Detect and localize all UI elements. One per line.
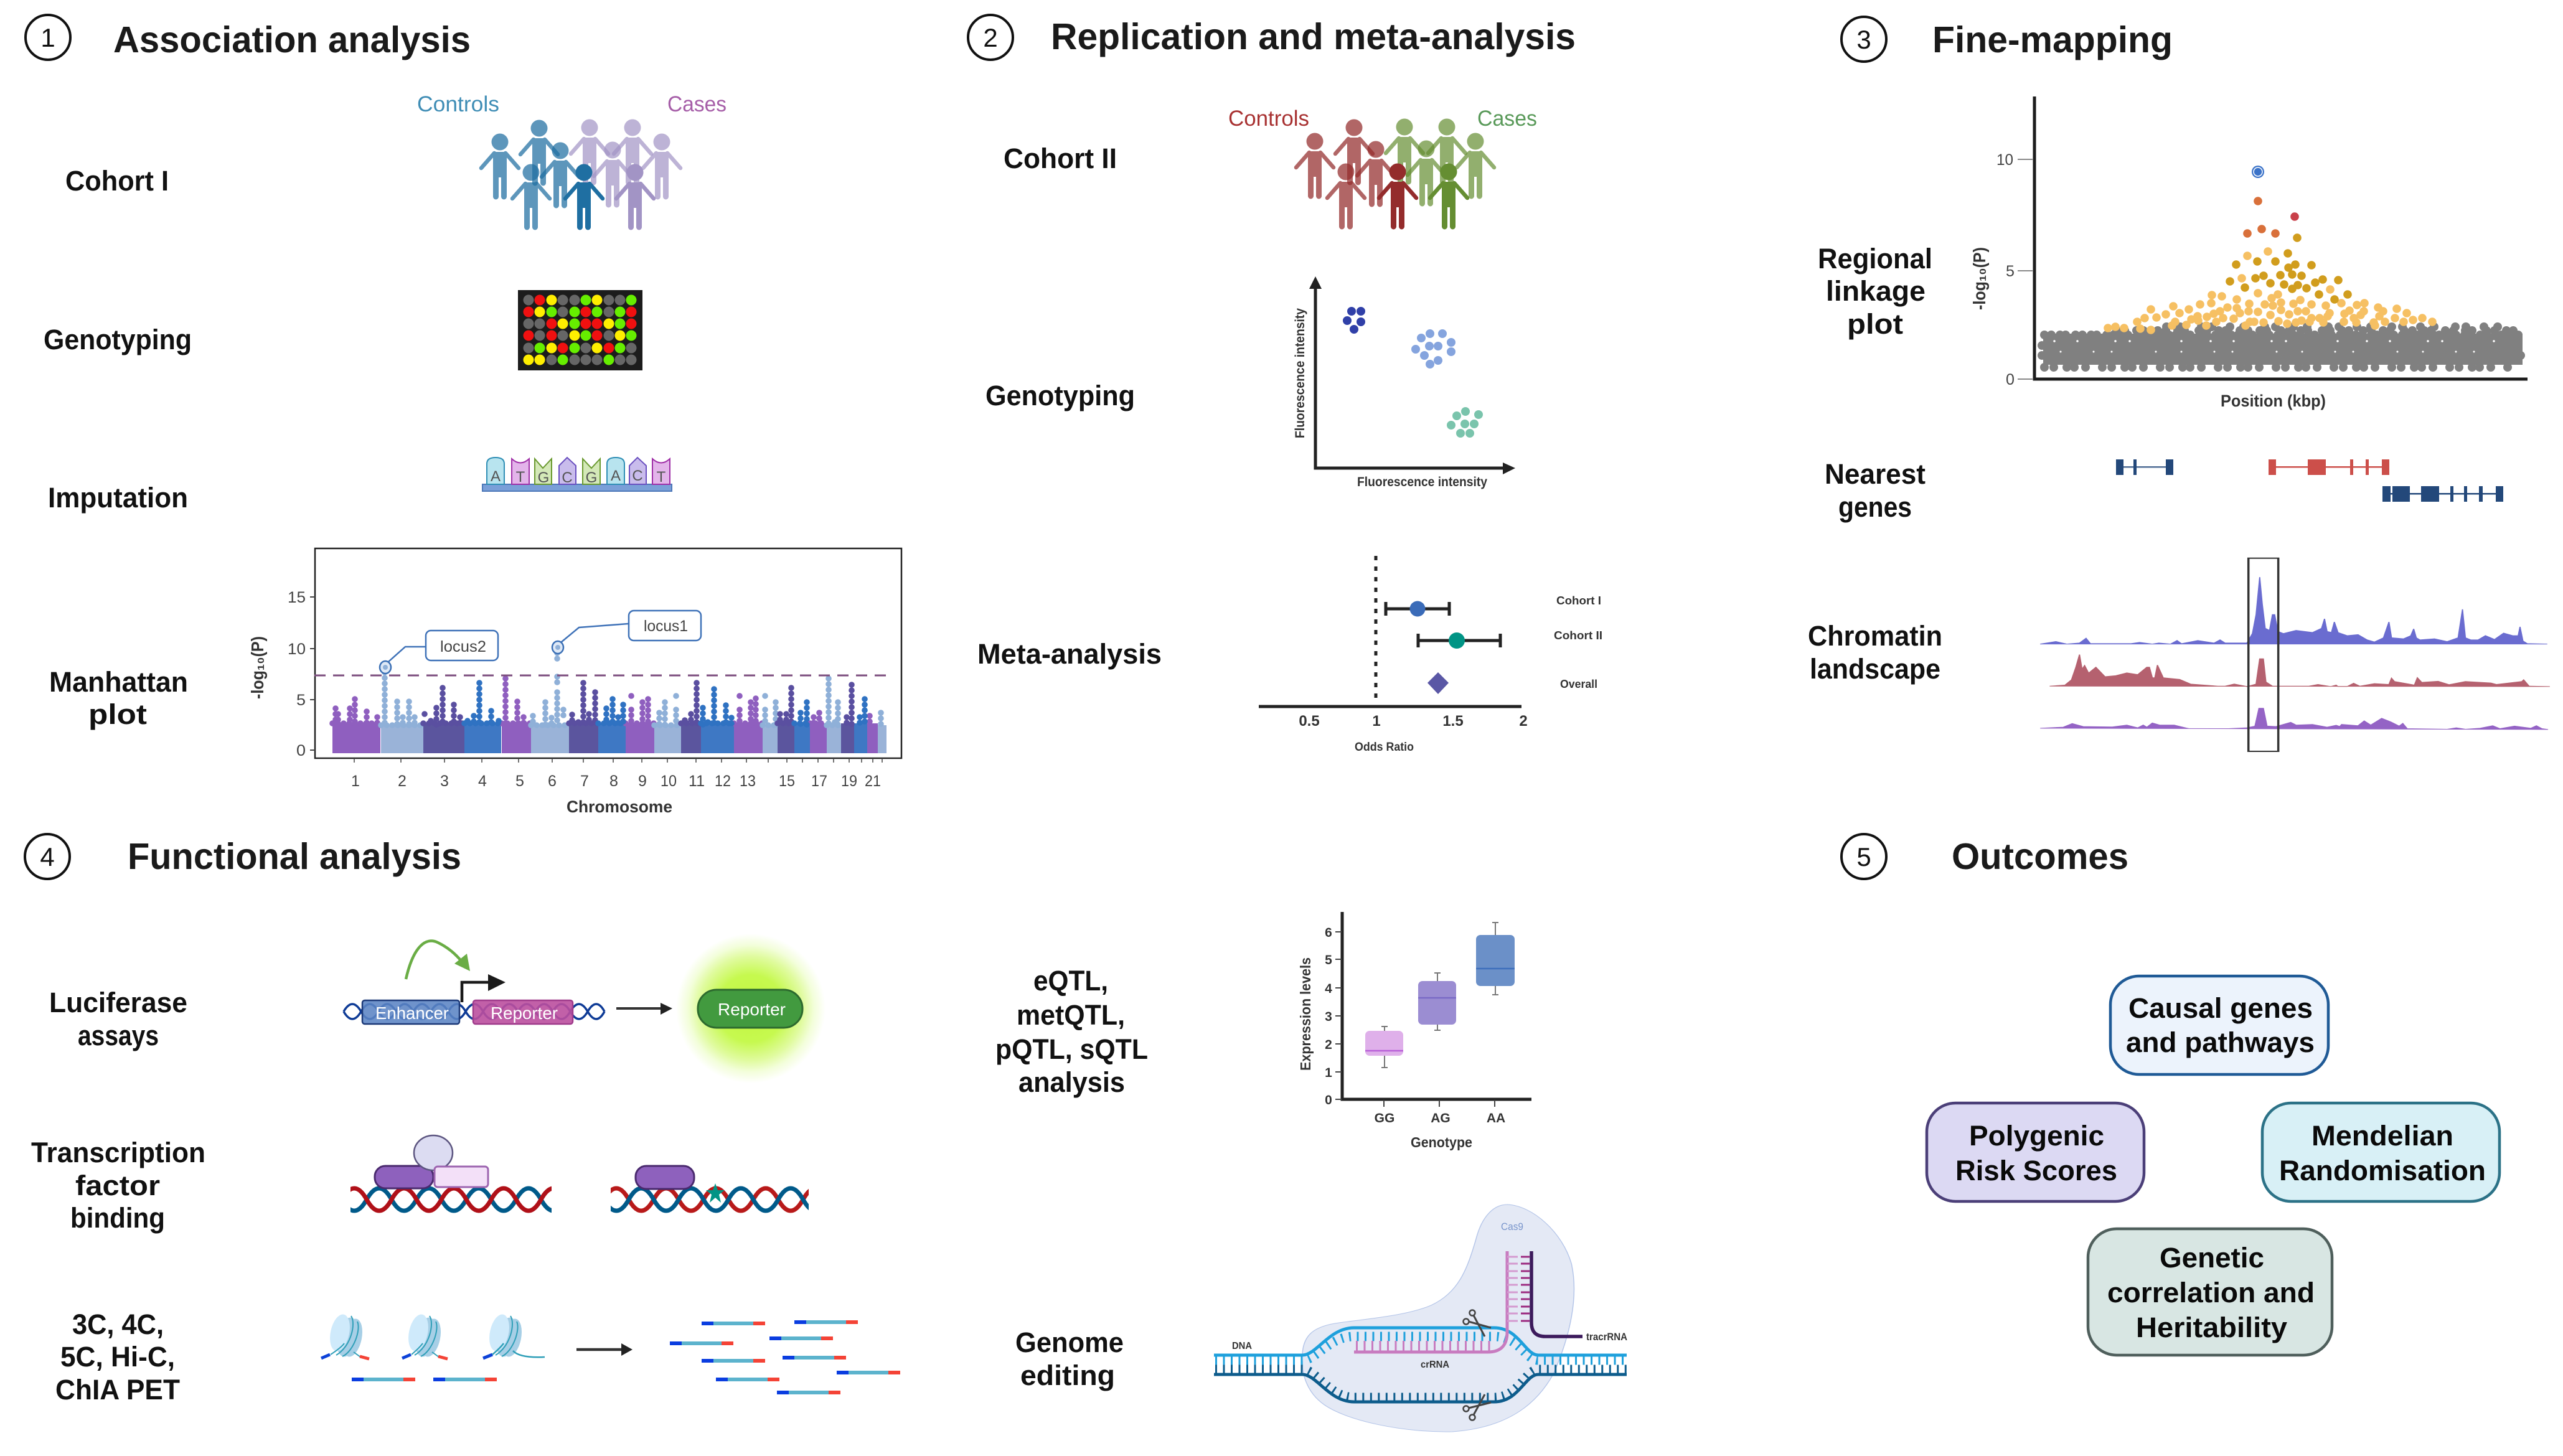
arrow: promoter (462, 974, 506, 1002)
label: 3C 4C 5C Hi-C ChIA PET (55, 1308, 180, 1406)
chart: forest plot: 2 (1519, 713, 1528, 730)
box: genetic correlation and heritability: correlation and (2107, 1277, 2315, 1308)
cases label: Cases (667, 92, 727, 116)
label: 3C 4C 5C Hi-C ChIA PET: 3C, 4C, (72, 1308, 164, 1340)
chart: expression box plot: AG (1431, 1111, 1451, 1125)
chart: expression box plot: 1 (1325, 1066, 1332, 1080)
x axis ticks and labels (351, 758, 882, 790)
LD SNPs (2108, 201, 2432, 330)
label: chromatin landscape: landscape (1810, 653, 1940, 685)
chart: chromatin tracks (2040, 558, 2550, 751)
x axis ticks and labels: 13 (740, 773, 756, 790)
chart: regional linkage plot: 5 (2006, 263, 2015, 280)
locus 1 callout: locus1 (644, 618, 688, 635)
label: cohort II: Cohort II (1004, 143, 1117, 174)
label: meta-analysis: Meta-analysis (977, 638, 1162, 670)
box: causal genes and pathways: and pathways (2126, 1026, 2315, 1058)
label: nearest genes (1825, 458, 1926, 523)
panel: replication and meta-analysis (968, 15, 1602, 754)
icon: imputation nucleotides: T (657, 469, 666, 486)
x axis ticks and labels: 12 (715, 773, 731, 790)
locus 2 callout: locus2 (440, 638, 486, 655)
association dots (332, 647, 881, 725)
gene: navy 2 (2382, 486, 2503, 502)
x axis ticks and labels: 1 (351, 773, 360, 790)
label: luciferase assays (49, 987, 187, 1051)
x axis ticks and labels: 3 (440, 773, 449, 790)
box: polygenic risk scores: Polygenic (1969, 1120, 2104, 1152)
background SNPs (2042, 327, 2525, 367)
chart: expression box plot: 2 (1325, 1038, 1332, 1052)
step number 1 (26, 15, 70, 60)
gene models (2116, 459, 2503, 502)
chart: genotype clusters: Fluorescence intensity (1293, 308, 1307, 438)
track: purple (2040, 708, 2548, 730)
heading: outcomes: Outcomes (1952, 836, 2128, 877)
diagram: CRISPR Cas9: tracrRNA (1586, 1331, 1627, 1343)
label: 3C 4C 5C Hi-C ChIA PET: 5C, Hi-C, (60, 1341, 175, 1373)
step number 5 (1841, 834, 1886, 879)
label: genome editing: editing (1020, 1360, 1115, 1391)
chart: expression box plot: Genotype (1411, 1134, 1472, 1150)
scissors (1463, 1310, 1491, 1421)
chart: expression box plot: 6 (1325, 926, 1332, 940)
chart: forest plot: 0.5 (1299, 713, 1320, 730)
icon: imputation nucleotides: G (586, 469, 597, 486)
box: GG (1365, 1026, 1403, 1068)
diagram: CRISPR Cas9: Cas9 (1501, 1221, 1523, 1233)
box: polygenic risk scores (1927, 1103, 2144, 1201)
cohort II estimate (1418, 632, 1500, 649)
icon: imputation nucleotides: T (516, 469, 525, 486)
heading: fine-mapping: Fine-mapping (1932, 19, 2173, 60)
chart: forest plot: Cohort II (1554, 629, 1602, 642)
chart: genotype clusters (1293, 276, 1515, 489)
Cas9 protein (1302, 1205, 1574, 1432)
chart: forest plot (1259, 556, 1602, 754)
diagram: CRISPR Cas9 (1214, 1205, 1627, 1432)
tracrRNA (1521, 1251, 1582, 1336)
box: causal genes and pathways: Causal genes (2128, 992, 2313, 1024)
diagram: luciferase reporter construct (344, 941, 604, 1024)
x axis ticks and labels: 17 (811, 773, 827, 790)
heading: replication and meta-analysis: Replication and meta-analysis (1051, 16, 1576, 57)
chart: expression box plot: 0 (1325, 1093, 1332, 1107)
arrow: chromatin capture (576, 1343, 633, 1356)
label: QTL analysis: pQTL, sQTL (995, 1033, 1148, 1065)
panel: fine-mapping (1808, 17, 2550, 751)
x axis ticks and labels: 2 (398, 773, 407, 790)
chart: regional linkage plot: -log₁₀(P) (1970, 247, 1989, 310)
x axis ticks and labels: 21 (865, 773, 881, 790)
chart: expression box plot: AA (1487, 1111, 1505, 1125)
locus 2 callout (380, 631, 498, 674)
x axis ticks and labels: 15 (779, 773, 795, 790)
diagram: nucleosomes (321, 1313, 545, 1359)
step number 4 (25, 834, 70, 879)
label: genotyping: Genotyping (44, 324, 192, 355)
highlight box (2249, 558, 2278, 751)
box: AA (1476, 923, 1515, 995)
diagram: CRISPR Cas9: DNA (1232, 1341, 1252, 1351)
x axis title: Chromosome (567, 797, 672, 816)
step number 2 (968, 15, 1013, 60)
label: luciferase assays: Luciferase (49, 987, 187, 1018)
step number 2: 2 (983, 23, 998, 52)
chart: forest plot: 1.5 (1442, 713, 1464, 730)
chart: expression box plot: 4 (1325, 982, 1332, 996)
heading: functional analysis: Functional analysis (128, 836, 461, 877)
chart: genotype clusters: Fluorescence intensity (1357, 475, 1487, 489)
x axis ticks and labels: 5 (515, 773, 524, 790)
chart: expression box plot (1297, 912, 1531, 1150)
icon: imputation nucleotides: C (632, 467, 643, 484)
icon: imputation nucleotides: G (538, 469, 549, 486)
label: chromatin landscape (1808, 620, 1942, 685)
arrow: enhancer action (406, 941, 470, 979)
enhancer box: Enhancer (375, 1003, 449, 1023)
icon: cohort II people (1296, 118, 1494, 229)
track: red (2049, 655, 2550, 687)
y axis title: -log₁₀(P) (248, 636, 267, 699)
label: 3C 4C 5C Hi-C ChIA PET: ChIA PET (55, 1374, 180, 1406)
y axis ticks and labels: 0 (296, 742, 306, 759)
track: blue (2040, 577, 2547, 644)
label: nearest genes: genes (1838, 491, 1912, 523)
label: transcription factor binding: Transcription (31, 1137, 205, 1168)
step number 3: 3 (1856, 25, 1871, 54)
label: regional linkage plot: Regional (1818, 243, 1932, 275)
label: QTL analysis (995, 965, 1148, 1098)
chart: forest plot: Cohort I (1556, 594, 1601, 607)
label: nearest genes: Nearest (1825, 458, 1926, 490)
box: mendelian randomisation: Mendelian (2311, 1120, 2453, 1152)
chart: forest plot: Overall (1560, 678, 1597, 690)
chart: expression box plot: GG (1375, 1111, 1394, 1125)
glowing reporter protein: Reporter (718, 1000, 786, 1019)
box: AG (1418, 973, 1456, 1030)
x axis ticks and labels: 7 (580, 773, 589, 790)
label: QTL analysis: eQTL, (1033, 965, 1108, 997)
chart: regional linkage plot (1970, 96, 2528, 410)
y axis ticks and labels: 15 (288, 589, 306, 606)
icon: imputation nucleotides: A (491, 468, 501, 485)
label: luciferase assays: assays (78, 1020, 159, 1051)
label: chromatin landscape: Chromatin (1808, 620, 1942, 652)
icon: imputation nucleotides: A (611, 467, 621, 484)
x axis ticks and labels: 4 (478, 773, 487, 790)
chart: expression box plot: 5 (1325, 953, 1332, 967)
label: regional linkage plot (1818, 243, 1932, 340)
DNA strands (1214, 1328, 1627, 1402)
step number 4: 4 (40, 842, 55, 871)
reporter box (473, 1000, 573, 1024)
icon: genotyping chip (518, 290, 642, 370)
sequenced fragments (670, 1320, 900, 1394)
panel: outcomes (1841, 834, 2500, 1355)
chart: expression box plot: 3 (1325, 1010, 1332, 1024)
chart: regional linkage plot: 10 (1996, 151, 2013, 169)
label: manhattan plot: plot (88, 698, 147, 730)
lead SNP (2252, 166, 2264, 178)
x axis ticks and labels: 8 (609, 773, 618, 790)
diagram: TF on variant DNA (611, 1165, 809, 1213)
y axis ticks and labels (288, 589, 315, 759)
cases label: Cases (1477, 106, 1537, 131)
icon: imputation nucleotides: C (562, 469, 573, 486)
genome-wide significance line (314, 675, 893, 676)
icon: imputation nucleotides (482, 458, 672, 491)
fragments before ligation (352, 1378, 497, 1381)
chart: manhattan plot (248, 548, 901, 816)
enhancer box (362, 1000, 459, 1024)
label: transcription factor binding (31, 1137, 205, 1234)
label: regional linkage plot: linkage (1826, 275, 1926, 307)
reporter box: Reporter (491, 1003, 558, 1023)
icon: cohort I people (481, 120, 680, 230)
y axis ticks and labels: 5 (296, 692, 306, 709)
gene: navy 1 (2116, 459, 2173, 475)
step number 1: 1 (40, 23, 55, 52)
glowing reporter protein (676, 934, 825, 1083)
chromosome bars (332, 723, 886, 753)
x axis ticks and labels: 11 (689, 773, 705, 790)
crRNA (1354, 1251, 1518, 1352)
label: genome editing: Genome (1015, 1327, 1124, 1358)
box: mendelian randomisation (2262, 1103, 2500, 1201)
locus 1 callout (552, 611, 701, 654)
label: genotyping: Genotyping (985, 380, 1135, 411)
label: manhattan plot (49, 666, 188, 730)
overall estimate (1427, 672, 1449, 694)
label: transcription factor binding: binding (70, 1202, 165, 1234)
y axis ticks and labels: 10 (288, 641, 306, 658)
label: manhattan plot: Manhattan (49, 666, 188, 698)
cohort I estimate (1386, 601, 1449, 616)
diagram: CRISPR Cas9: crRNA (1421, 1360, 1449, 1370)
chart: forest plot: 1 (1372, 713, 1381, 730)
label: QTL analysis: metQTL, (1017, 999, 1125, 1031)
step number 5: 5 (1856, 842, 1871, 871)
label: transcription factor binding: factor (75, 1170, 160, 1201)
arrow: luciferase result (616, 1003, 672, 1015)
panel: association analysis (26, 15, 901, 816)
label: genome editing (1015, 1327, 1124, 1391)
box: genetic correlation and heritability (2088, 1229, 2332, 1355)
controls label: Controls (417, 92, 499, 116)
label: regional linkage plot: plot (1847, 308, 1903, 340)
controls label: Controls (1228, 106, 1309, 131)
chart: forest plot: Odds Ratio (1355, 741, 1414, 754)
x axis ticks and labels: 9 (638, 773, 647, 790)
box: mendelian randomisation: Randomisation (2279, 1155, 2486, 1186)
label: cohort I: Cohort I (65, 165, 169, 197)
chart: regional linkage plot: Position (kbp) (2221, 392, 2326, 410)
x axis ticks and labels: 6 (548, 773, 557, 790)
label: imputation: Imputation (48, 482, 188, 514)
box: genetic correlation and heritability: Heritability (2136, 1312, 2287, 1343)
diagram: TF bound to reference DNA (342, 1135, 566, 1211)
box: causal genes and pathways (2110, 976, 2328, 1074)
heading: association analysis: Association analysis (113, 19, 471, 60)
label: QTL analysis: analysis (1018, 1066, 1125, 1098)
panel: functional analysis (25, 834, 900, 1406)
panel: QTL and genome editing (995, 912, 1627, 1432)
step number 3 (1841, 17, 1886, 62)
x axis ticks and labels: 10 (661, 773, 677, 790)
chart: expression box plot: Expression levels (1297, 957, 1314, 1071)
box: polygenic risk scores: Risk Scores (1955, 1155, 2117, 1186)
x axis ticks and labels: 19 (841, 773, 857, 790)
gene: red (2269, 459, 2389, 475)
chart: regional linkage plot: 0 (2006, 371, 2015, 388)
box: genetic correlation and heritability: Genetic (2160, 1242, 2264, 1274)
